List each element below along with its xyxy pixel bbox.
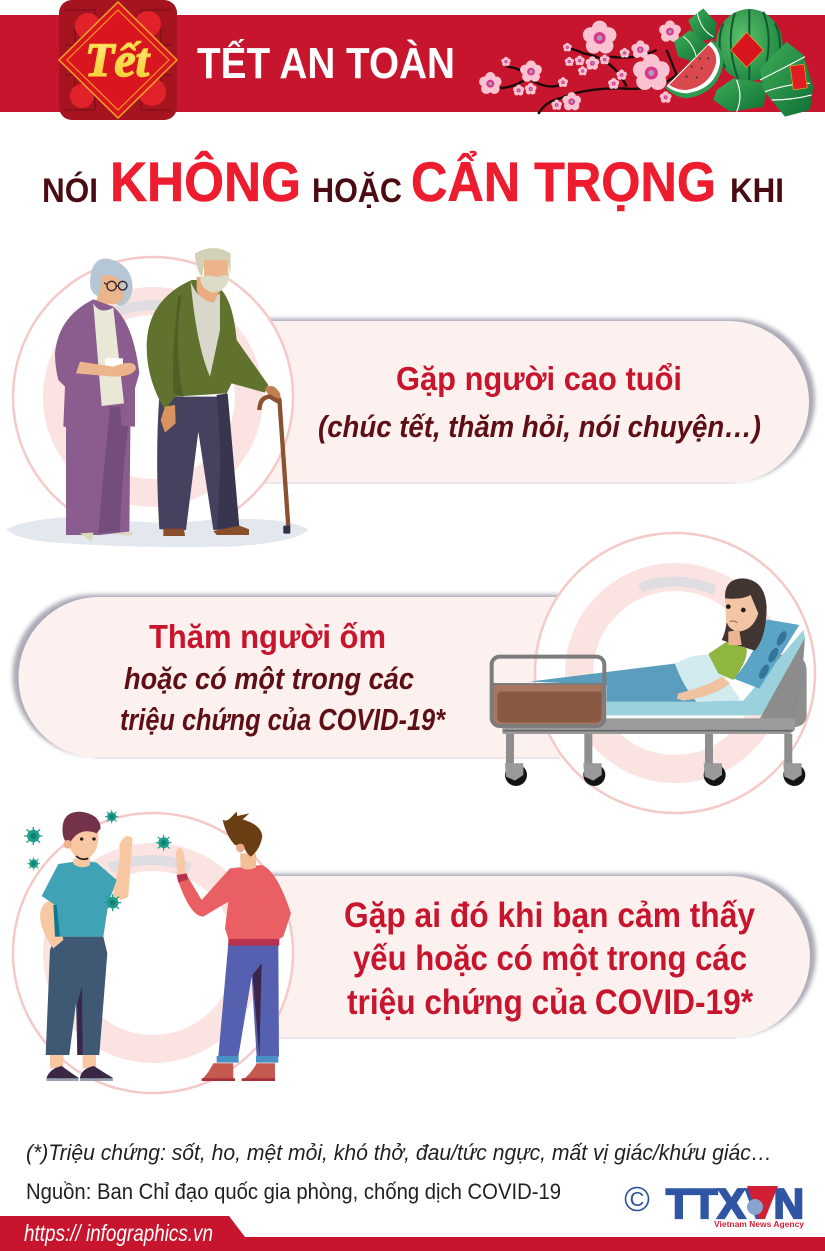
bánh chưng front bbox=[713, 42, 813, 117]
mattress bbox=[607, 630, 805, 715]
blanket bbox=[529, 663, 697, 702]
TTXVN logo: TTXVN bbox=[666, 1180, 804, 1227]
footnote: symptoms: (*)Triệu chứng: sốt, ho, mệt mỏi, khó thở, đau/tức ngực, mất vị giác/khứu giác… bbox=[26, 1140, 772, 1165]
text 3: Gặp ai đó khi bạn cảm thấy bbox=[344, 896, 755, 935]
pillow bbox=[733, 619, 799, 689]
text 2 bbox=[120, 618, 447, 737]
circle emblem 3 bbox=[13, 813, 293, 1093]
panel 2: visiting the sick bbox=[13, 533, 815, 813]
text 2: hoặc có một trong các bbox=[124, 661, 414, 696]
banner title: TẾT AN TOÀN bbox=[197, 38, 455, 88]
main heading: KHI bbox=[730, 172, 784, 210]
main heading: KHÔNG bbox=[110, 150, 301, 213]
illustration: patient in hospital bed bbox=[492, 578, 807, 786]
card 2 bbox=[13, 594, 585, 758]
circle emblem 1 bbox=[13, 257, 293, 537]
watermelon slice bbox=[665, 40, 723, 98]
copyright mark: C bbox=[630, 1189, 644, 1211]
footboard bbox=[492, 657, 604, 727]
watermelon bbox=[716, 9, 783, 81]
source line: Nguồn: Ban Chỉ đạo quốc gia phòng, chống dịch COVID-19 bbox=[26, 1179, 561, 1204]
panel 1: meeting the elderly bbox=[6, 248, 815, 547]
TTXVN logo: Vietnam News Agency bbox=[714, 1219, 804, 1229]
illustration: two men and viruses bbox=[24, 810, 291, 1081]
illustration: elderly couple bbox=[6, 248, 308, 547]
bed frame bbox=[502, 718, 795, 734]
text 2: triệu chứng của COVID-19* bbox=[120, 702, 447, 737]
card 3 bbox=[240, 874, 816, 1038]
text 2: Thăm người ốm bbox=[149, 618, 386, 655]
logo: Tết emblem: Tết bbox=[85, 34, 151, 87]
text 3: triệu chứng của COVID-19* bbox=[347, 983, 753, 1022]
logo: Tết emblem bbox=[59, 0, 177, 120]
ground shadow bbox=[6, 517, 308, 547]
text 3 bbox=[344, 896, 755, 1022]
card 1 bbox=[240, 318, 815, 483]
footer band with URL bbox=[0, 1216, 825, 1251]
main heading: HOẶC bbox=[312, 172, 402, 210]
decoration: plum blossom, watermelon and bánh chưng bbox=[479, 8, 813, 117]
text 1 bbox=[318, 360, 761, 444]
main heading: CẨN TRỌNG bbox=[411, 150, 716, 213]
wheels bbox=[505, 734, 805, 786]
man in teal shirt bbox=[40, 812, 133, 1081]
copyright mark bbox=[626, 1188, 648, 1211]
patient bbox=[677, 578, 767, 701]
blossom branch bbox=[479, 20, 681, 114]
text 1: (chúc tết, thăm hỏi, nói chuyện…) bbox=[318, 409, 761, 444]
main heading bbox=[42, 150, 784, 213]
viruses bbox=[24, 810, 172, 911]
text 1: Gặp người cao tuổi bbox=[396, 360, 682, 397]
main heading: NÓI bbox=[42, 172, 98, 210]
man in red sweater bbox=[176, 812, 291, 1081]
panel 3: meeting others when unwell bbox=[13, 810, 816, 1093]
bánh chưng back bbox=[674, 8, 717, 63]
elderly man with cane bbox=[147, 248, 290, 536]
circle emblem 2 bbox=[535, 533, 815, 813]
head rail bbox=[763, 655, 807, 727]
top banner bbox=[0, 0, 825, 120]
elderly woman bbox=[55, 258, 139, 542]
text 3: yếu hoặc có một trong các bbox=[353, 939, 747, 978]
footer band with URL: https:// infographics.vn bbox=[24, 1220, 213, 1246]
